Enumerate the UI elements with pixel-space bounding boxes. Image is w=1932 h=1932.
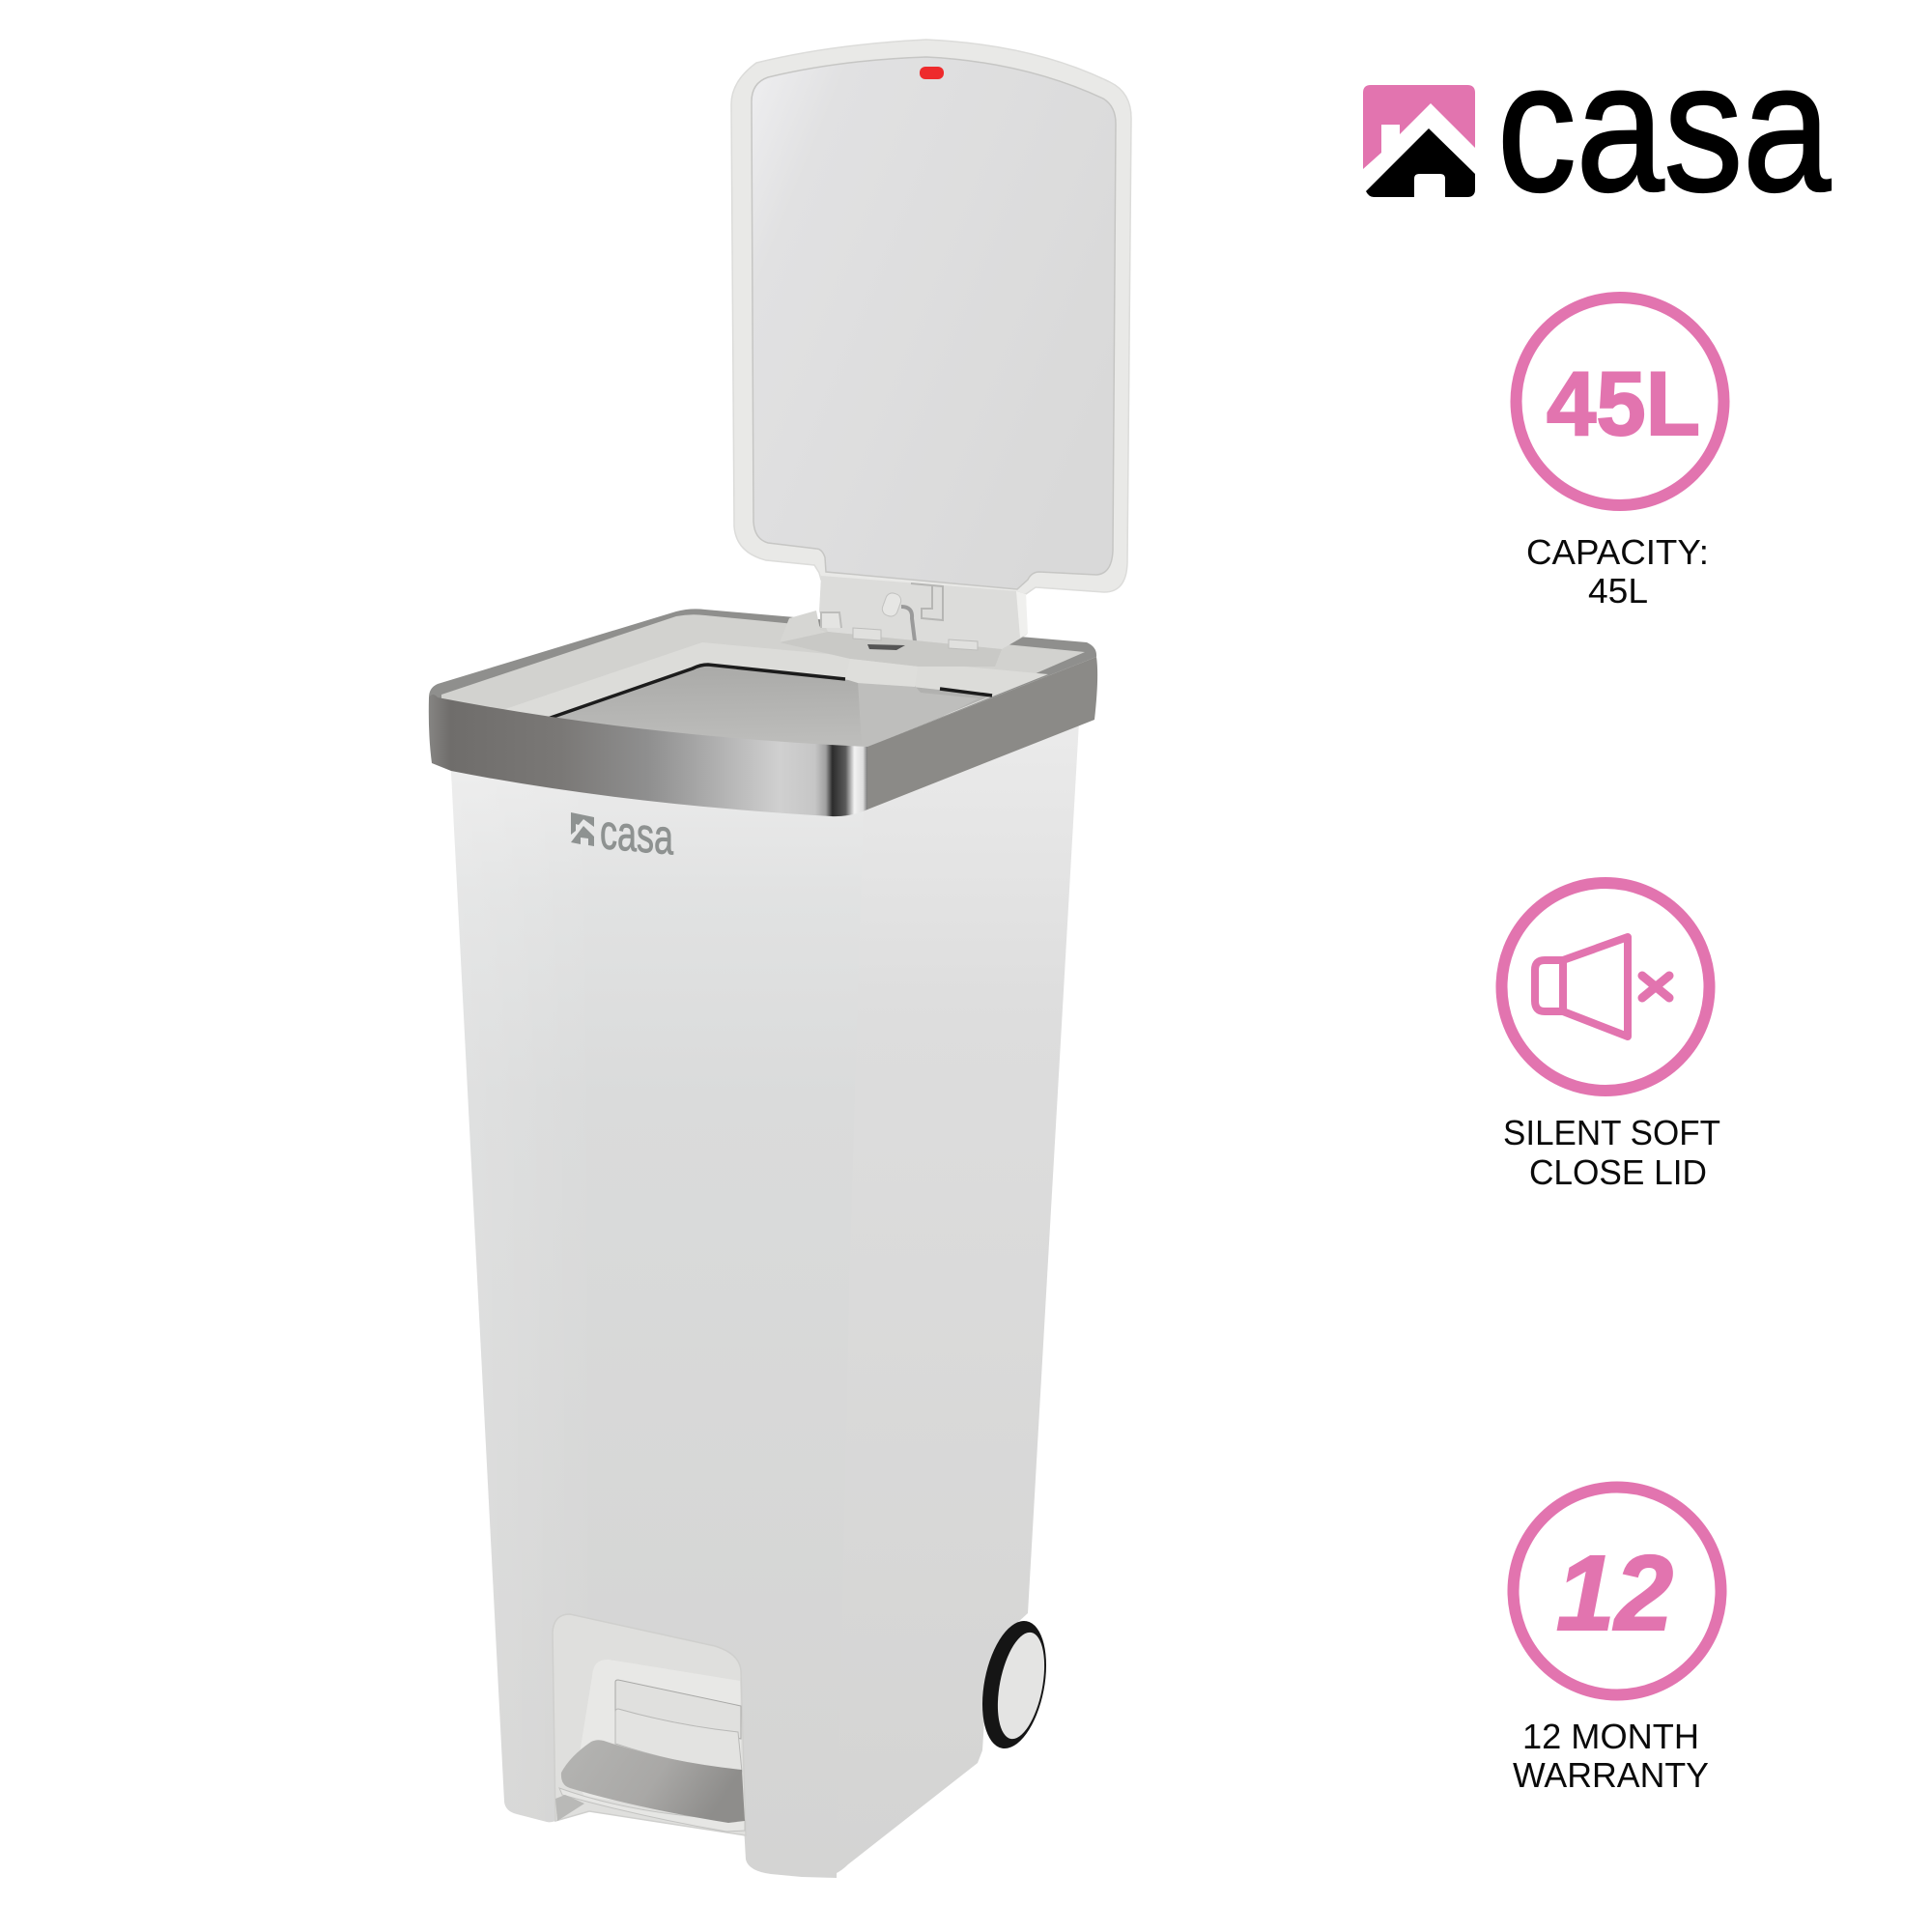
- feature: warranty: [1513, 1488, 1721, 1795]
- logo icon: black house: [1366, 128, 1475, 197]
- pedal shadow: [555, 1795, 584, 1821]
- capacity label: [1526, 532, 1709, 611]
- pedal base plate: [559, 1788, 745, 1832]
- hinge platform: [780, 611, 1002, 687]
- hinge right tab: [1016, 591, 1028, 638]
- hinge knob: [880, 591, 903, 618]
- feature: silent soft close lid: [1501, 883, 1720, 1192]
- steel foot pedal: [561, 1740, 745, 1823]
- pedal upper plate: [615, 1680, 741, 1739]
- warranty badge ring: [1513, 1488, 1721, 1694]
- icon: muted speaker: [1535, 937, 1669, 1037]
- hinge metal spring: [901, 607, 915, 641]
- capacity badge ring: [1517, 298, 1723, 505]
- feature: capacity: [1517, 298, 1723, 611]
- capacity label: 45L: [1588, 571, 1648, 611]
- rim right side band: [867, 657, 1097, 810]
- rim front band: [429, 695, 867, 816]
- warranty badge value: 12: [1556, 1534, 1673, 1653]
- capacity badge value: 45L: [1547, 353, 1700, 454]
- wheel: [973, 1615, 1056, 1754]
- silent label: [1503, 1113, 1720, 1192]
- lid inner panel: [752, 57, 1116, 589]
- logo icon: pink roof: [1363, 85, 1475, 169]
- silent label: SILENT SOFT: [1503, 1113, 1720, 1152]
- hinge left bracket: [821, 612, 841, 628]
- foot pedal recess: [553, 1614, 746, 1835]
- rim inner opening: [548, 665, 992, 747]
- logo word: casa: [1497, 25, 1831, 230]
- rim opening gasket lines: [548, 665, 992, 719]
- small logo icon: [571, 812, 594, 846]
- small casa logo on bin: [571, 805, 674, 866]
- platform clips: [853, 628, 978, 650]
- platform raised left wall: [780, 611, 828, 642]
- red lid indicator: [920, 67, 944, 79]
- pedal lower plate: [615, 1709, 742, 1772]
- small logo word: casa: [600, 805, 674, 866]
- warranty label: WARRANTY: [1513, 1755, 1709, 1795]
- hinge plate: [819, 576, 1028, 649]
- hinge backing: [819, 576, 1027, 649]
- wheel hub: [990, 1629, 1052, 1743]
- body front face: [450, 753, 865, 1878]
- body left highlight: [450, 753, 618, 1822]
- product photo: white pedal bin with open lid: [429, 40, 1131, 1878]
- lighter front strip: [845, 659, 918, 687]
- rim top silver edge: [429, 609, 1096, 747]
- warranty label: 12 MONTH: [1522, 1717, 1699, 1756]
- recess inner panel: [576, 1660, 742, 1816]
- rim lip surface: [441, 614, 1085, 747]
- recess walls: [553, 1614, 746, 1835]
- capacity label: CAPACITY:: [1526, 532, 1709, 572]
- body side face: [821, 705, 1080, 1877]
- platform hole: [867, 644, 905, 650]
- silent badge ring: [1501, 883, 1710, 1091]
- wheel tyre: [973, 1615, 1056, 1754]
- stainless steel rim: [429, 576, 1097, 816]
- lid outer frame: [731, 40, 1131, 594]
- rim inner wall: [502, 642, 1048, 747]
- platform floor: [780, 632, 1002, 667]
- silent label: CLOSE LID: [1529, 1152, 1707, 1192]
- brand logo: [1363, 25, 1831, 230]
- open lid: [731, 40, 1131, 594]
- warranty label: [1513, 1717, 1709, 1795]
- hinge bracket: [911, 583, 943, 620]
- well corner column: [858, 681, 979, 747]
- bin body: [450, 705, 1080, 1878]
